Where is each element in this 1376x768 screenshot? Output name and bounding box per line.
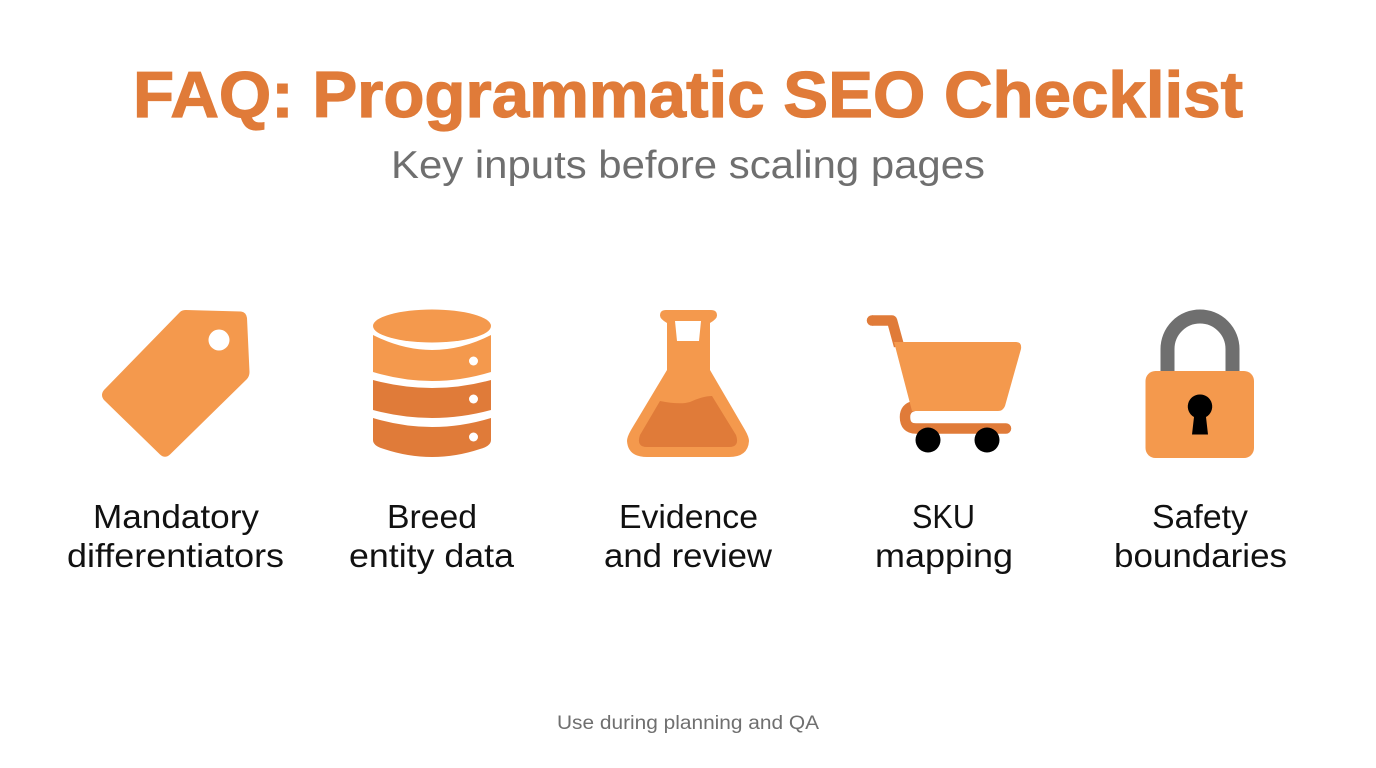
icon: database [373, 310, 491, 457]
label: safety boundaries [1114, 498, 1287, 574]
label: safety boundaries: boundaries [1114, 537, 1287, 574]
label: mandatory differentiators: Mandatory [93, 498, 260, 535]
label: breed entity data [349, 498, 515, 574]
label: evidence and review [604, 498, 772, 574]
footer note: Use during planning and QA [557, 713, 819, 734]
label: mandatory differentiators: differentiators [67, 537, 284, 574]
label: evidence and review: and review [604, 537, 772, 574]
label: sku mapping [875, 498, 1013, 574]
label: sku mapping: mapping [875, 537, 1013, 574]
label: breed entity data: Breed [387, 498, 477, 535]
label: sku mapping: SKU [912, 498, 975, 535]
label: breed entity data: entity data [349, 537, 515, 574]
subtitle: Key inputs before scaling pages [391, 144, 985, 187]
label: mandatory differentiators [67, 498, 284, 574]
icon: padlock [1146, 316, 1254, 458]
icon: shopping cart [867, 315, 1021, 452]
title: FAQ: Programmatic SEO Checklist [133, 58, 1243, 131]
label: safety boundaries: Safety [1152, 498, 1249, 535]
label: evidence and review: Evidence [619, 498, 758, 535]
icon: price tag [102, 310, 250, 457]
icon: flask [627, 310, 749, 457]
